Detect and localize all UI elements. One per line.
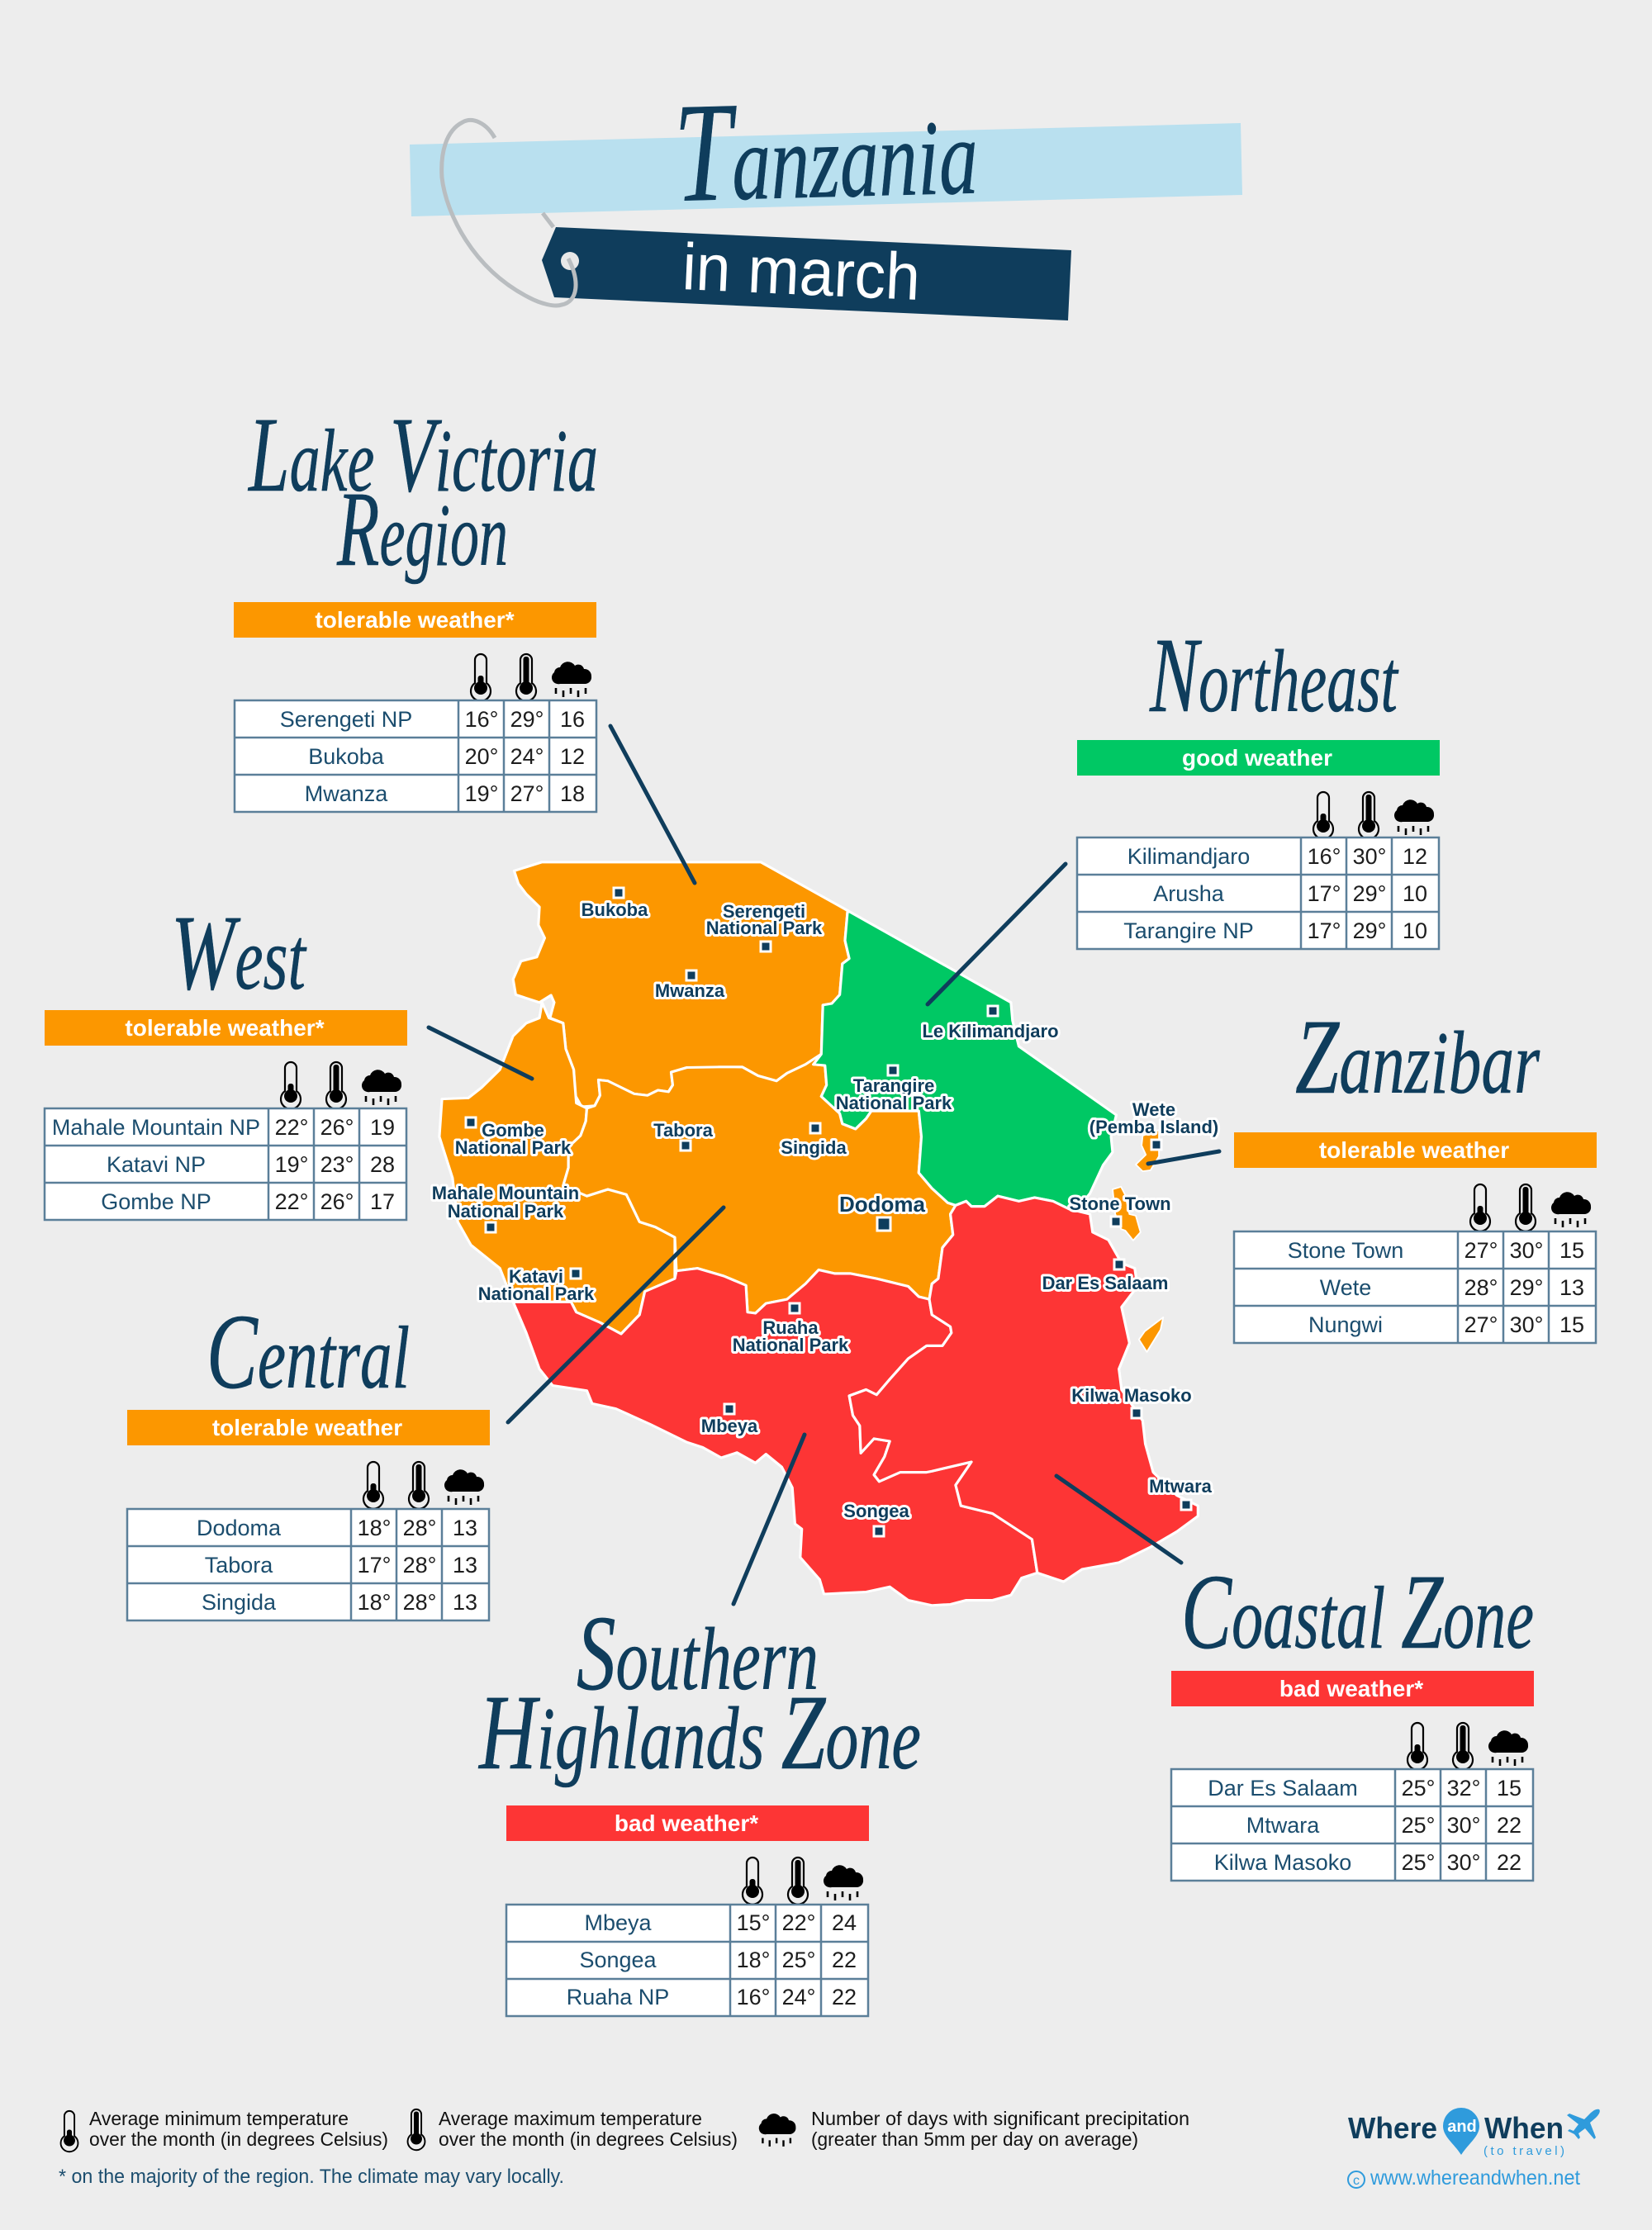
table: Ruaha NP	[567, 1985, 669, 2009]
legend text: maximum: over the month (in degrees Celsius)	[439, 2128, 738, 2150]
table: Bukoba	[308, 744, 385, 769]
map labels: Gombe	[482, 1120, 544, 1141]
table: 18°	[358, 1590, 391, 1615]
panel: Central	[127, 1410, 490, 1620]
map labels: Serengeti	[723, 901, 805, 922]
table: Wete	[1320, 1275, 1371, 1300]
table: Kilimandjaro	[1127, 844, 1250, 869]
legend text: precipitation: Number of days with significant precipitation	[811, 2108, 1189, 2129]
icon: plane	[1567, 2109, 1600, 2139]
map labels: Dar Es Salaam	[1042, 1273, 1168, 1293]
status bar	[234, 602, 596, 638]
table: Katavi NP	[107, 1152, 206, 1177]
column icons	[743, 1858, 863, 1905]
table: 10	[1403, 918, 1427, 943]
table: 22	[1497, 1850, 1521, 1875]
region: Northeast	[814, 910, 1116, 1209]
table: 22	[832, 1948, 857, 1972]
table: 25°	[1402, 1813, 1435, 1838]
table: 16	[560, 707, 585, 732]
panel: Zanzibar	[1234, 1132, 1597, 1343]
table: 29°	[1510, 1275, 1543, 1300]
panel: Lake Victoria	[234, 602, 596, 812]
table	[1171, 1769, 1533, 1881]
panel: Coastal Zone	[1171, 1671, 1534, 1881]
table: 24	[832, 1910, 857, 1935]
table: 25°	[1402, 1776, 1435, 1801]
light blue title ribbon	[410, 123, 1242, 216]
heading: Southern Highlands Zone: Highlands Zone	[478, 1673, 921, 1792]
status bar	[45, 1010, 407, 1046]
table: Serengeti NP	[280, 707, 412, 732]
title text: Tanzania	[672, 67, 980, 232]
heading: Lake Victoria Region: Lake Victoria	[248, 396, 598, 515]
table: Kilwa Masoko	[1214, 1850, 1351, 1875]
table: 23°	[320, 1152, 354, 1177]
table: Nungwi	[1308, 1312, 1383, 1337]
tag hole	[561, 252, 579, 270]
map labels: National Park	[733, 1335, 849, 1355]
map labels: Mtwara	[1149, 1476, 1213, 1497]
table: 13	[453, 1516, 477, 1540]
table: 15	[1497, 1776, 1521, 1801]
table: Tarangire NP	[1123, 918, 1254, 943]
table: 26°	[320, 1189, 354, 1214]
island: Zanzibar	[1113, 1187, 1141, 1241]
status bar	[1234, 1132, 1597, 1168]
table: 22°	[275, 1115, 308, 1140]
table: Songea	[579, 1948, 657, 1972]
table: 30°	[1353, 844, 1386, 869]
status bar	[127, 1410, 490, 1445]
subtitle text: in march	[681, 230, 922, 314]
table: 10	[1403, 881, 1427, 906]
table: Dodoma	[197, 1516, 282, 1540]
region: Central	[563, 1054, 956, 1313]
legend text: maximum: Average maximum temperature	[439, 2108, 702, 2129]
table: 22°	[782, 1910, 815, 1935]
table: Stone Town	[1288, 1238, 1403, 1263]
table: 28°	[1464, 1275, 1498, 1300]
status bar: bad weather*	[1279, 1676, 1423, 1701]
table: 13	[1559, 1275, 1584, 1300]
status bar: tolerable weather*	[125, 1015, 325, 1041]
heading: Northeast: Northeast	[1149, 616, 1399, 735]
map labels: Le Kilimandjaro	[922, 1021, 1059, 1041]
map labels: Mwanza	[655, 980, 725, 1001]
column icons	[1408, 1723, 1528, 1770]
map labels: Wete	[1132, 1099, 1175, 1120]
region: West	[439, 1003, 675, 1334]
column icons	[1313, 792, 1434, 839]
heading: West: West	[171, 894, 307, 1013]
table: 16°	[737, 1985, 770, 2009]
legend text: precipitation	[811, 2108, 1189, 2150]
table: 25°	[782, 1948, 815, 1972]
legend text: minimum: over the month (in degrees Celsius)	[89, 2128, 388, 2150]
map markers	[466, 888, 1191, 1536]
table: 12	[560, 744, 585, 769]
copyright symbol	[1348, 2171, 1365, 2188]
logo and: and	[1447, 2118, 1477, 2136]
map labels: Songea	[843, 1501, 909, 1521]
logo wordmark left: Where	[1348, 2111, 1437, 2145]
table: 17°	[1308, 881, 1341, 906]
table: Dar Es Salaam	[1208, 1776, 1358, 1801]
table: 15	[1559, 1238, 1584, 1263]
table: 28	[370, 1152, 395, 1177]
table	[45, 1108, 406, 1220]
table: 29°	[510, 707, 544, 732]
column icons	[1470, 1184, 1591, 1231]
logo pin	[1443, 2108, 1479, 2155]
table: 29°	[1353, 918, 1386, 943]
table: 12	[1403, 844, 1427, 869]
legend text: minimum: Average minimum temperature	[89, 2108, 349, 2129]
table: Singida	[202, 1590, 277, 1615]
table: 25°	[1402, 1850, 1435, 1875]
table	[127, 1509, 489, 1620]
heading: Southern Highlands Zone: Southern	[577, 1594, 819, 1713]
map labels: Tarangire	[853, 1075, 934, 1096]
table: 32°	[1447, 1776, 1480, 1801]
region: Coastal	[849, 1196, 1198, 1582]
status bar: bad weather*	[615, 1810, 758, 1836]
table: 18	[560, 781, 585, 806]
map labels: Dodoma	[839, 1192, 926, 1217]
legend	[59, 2108, 1189, 2188]
table: Mbeya	[584, 1910, 653, 1935]
heading: Zanzibar: Zanzibar	[1295, 998, 1540, 1117]
map labels: Kilwa Masoko	[1071, 1385, 1192, 1406]
table: 15°	[737, 1910, 770, 1935]
table: Mahale Mountain NP	[52, 1115, 260, 1140]
table: 27°	[1464, 1312, 1498, 1337]
map labels: Katavi	[509, 1266, 563, 1287]
status bar: tolerable weather*	[315, 607, 515, 633]
status bar	[1171, 1671, 1534, 1706]
map labels: National Park	[448, 1201, 564, 1222]
icon: minimum temperature	[61, 2111, 78, 2152]
table	[1077, 837, 1439, 949]
legend text: precipitation: (greater than 5mm per day on average)	[811, 2128, 1138, 2150]
island: Pemba	[1136, 1130, 1159, 1171]
table: 19°	[465, 781, 498, 806]
footnote: * on the majority of the region. The climate may vary locally.	[59, 2166, 564, 2188]
copyright symbol: c	[1353, 2174, 1360, 2188]
status bar	[506, 1805, 869, 1841]
table: 30°	[1510, 1238, 1543, 1263]
map labels: National Park	[478, 1283, 595, 1304]
map labels: (Pemba Island)	[1089, 1117, 1218, 1137]
table: Arusha	[1153, 881, 1225, 906]
heading: Lake Victoria Region: Region	[336, 470, 508, 589]
table: 22	[1497, 1813, 1521, 1838]
map labels: Mahale Mountain	[432, 1183, 579, 1203]
legend text: maximum	[439, 2108, 738, 2150]
table: 22°	[275, 1189, 308, 1214]
table: 29°	[1353, 881, 1386, 906]
table: 28°	[403, 1516, 436, 1540]
table: Mwanza	[305, 781, 388, 806]
table: 15	[1559, 1312, 1584, 1337]
heading: Southern Highlands Zone	[478, 1594, 921, 1792]
table	[235, 700, 596, 812]
table: 24°	[510, 744, 544, 769]
island: Mafia	[1139, 1317, 1163, 1352]
table: 28°	[403, 1590, 436, 1615]
table: 27°	[510, 781, 544, 806]
column icons	[471, 654, 591, 701]
table: 30°	[1447, 1850, 1480, 1875]
map of Tanzania	[439, 862, 1198, 1606]
map labels	[432, 899, 1218, 1521]
table	[506, 1905, 868, 2016]
table: 17	[370, 1189, 395, 1214]
table	[1234, 1231, 1596, 1343]
status bar	[1077, 740, 1440, 776]
map labels: Stone Town	[1069, 1193, 1171, 1214]
heading: Lake Victoria Region	[248, 396, 598, 589]
table: Mtwara	[1246, 1813, 1320, 1838]
icon: maximum temperature	[408, 2109, 425, 2150]
table: 30°	[1447, 1813, 1480, 1838]
table: 16°	[465, 707, 498, 732]
table: 26°	[320, 1115, 354, 1140]
map labels: National Park	[455, 1137, 572, 1158]
leader lines	[429, 726, 1219, 1604]
table: 16°	[1308, 844, 1341, 869]
table: Gombe NP	[101, 1189, 211, 1214]
table: 22	[832, 1985, 857, 2009]
table: 18°	[358, 1516, 391, 1540]
table: 20°	[465, 744, 498, 769]
icon: precipitation	[759, 2114, 795, 2147]
heading: Central: Central	[206, 1293, 410, 1412]
table: 19°	[275, 1152, 308, 1177]
table: 13	[453, 1590, 477, 1615]
table: 17°	[358, 1553, 391, 1578]
map labels: National Park	[836, 1093, 952, 1113]
tag string loop	[442, 120, 576, 306]
region: Lake Victoria	[513, 862, 849, 1107]
status bar: good weather	[1182, 745, 1332, 771]
table: 30°	[1510, 1312, 1543, 1337]
map labels: National Park	[706, 918, 823, 938]
logo wordmark right: When	[1484, 2111, 1564, 2145]
logo tagline: (to travel)	[1483, 2144, 1564, 2158]
table: 17°	[1308, 918, 1341, 943]
map labels: Singida	[781, 1137, 847, 1158]
heading: Coastal Zone: Coastal Zone	[1181, 1553, 1534, 1672]
table: 28°	[403, 1553, 436, 1578]
column icons	[281, 1062, 401, 1109]
legend text: minimum	[89, 2108, 388, 2150]
status bar: tolerable weather	[1319, 1137, 1509, 1163]
dark tag	[542, 227, 1071, 320]
region: Southern Highlands	[513, 1269, 1037, 1606]
website: www.whereandwhen.net	[1370, 2166, 1580, 2190]
map labels: Ruaha	[762, 1317, 819, 1338]
table: 13	[453, 1553, 477, 1578]
map labels: Mbeya	[701, 1416, 758, 1436]
map labels: Bukoba	[582, 899, 648, 920]
table: 19	[370, 1115, 395, 1140]
table: Tabora	[205, 1553, 273, 1578]
logo	[1348, 2108, 1600, 2190]
table: 18°	[737, 1948, 770, 1972]
title banner	[410, 67, 1242, 320]
panel: Northeast	[1077, 740, 1440, 949]
status bar: tolerable weather	[212, 1415, 402, 1440]
panel: Southern Highlands Zone	[506, 1805, 869, 2016]
map labels: Tabora	[653, 1120, 714, 1141]
table: 27°	[1464, 1238, 1498, 1263]
column icons	[363, 1462, 484, 1509]
table: 24°	[782, 1985, 815, 2009]
panel: West	[45, 1010, 407, 1220]
